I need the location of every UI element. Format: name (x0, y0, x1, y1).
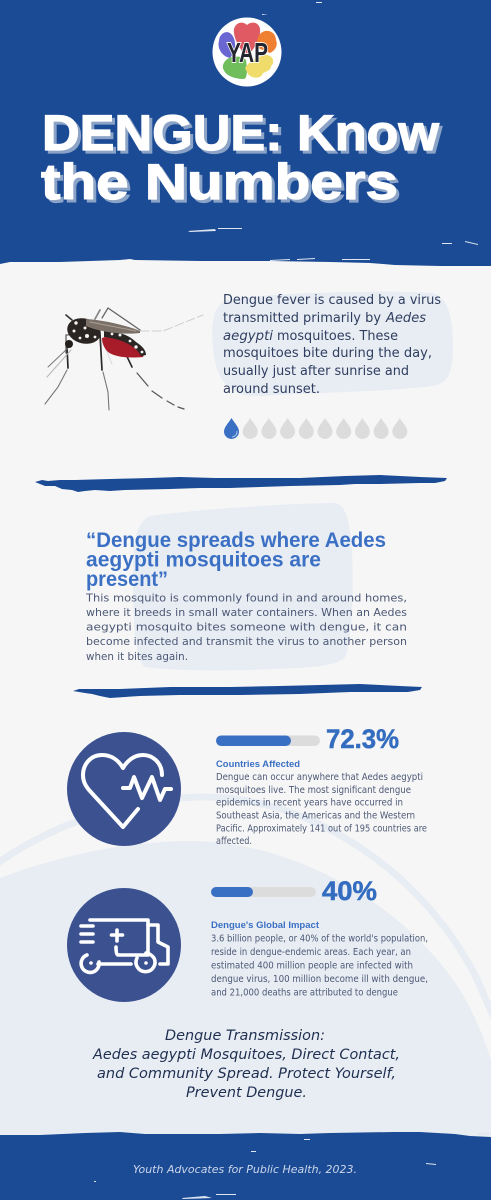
panel: intro text: around sunset. (223, 382, 320, 397)
stat: global impact: 40% (322, 876, 377, 906)
stat: countries affected (216, 724, 427, 847)
icon: ambulance (67, 888, 181, 1002)
quote body text: where it breeds in small water containers. When an Aedes (86, 607, 407, 619)
header banner (0, 0, 491, 266)
quote body text: become infected and transmit the virus to another person (86, 636, 407, 648)
title: DENGUE: Know (42, 105, 439, 161)
panel: quote (85, 503, 407, 670)
text backdrop blob (212, 292, 453, 396)
stat: countries affected: Countries Affected (216, 759, 300, 770)
stat: global impact: reside in dengue-endemic areas. Each year, an (211, 947, 411, 958)
footer banner (0, 1132, 491, 1200)
logo: YAP: YAP (227, 37, 268, 68)
quote body text (85, 592, 407, 663)
closing statement: Aedes aegypti Mosquitoes, Direct Contact, (92, 1047, 400, 1063)
icon: heart with pulse (67, 732, 181, 846)
progress bar 72.3% (216, 736, 320, 746)
closing statement (92, 1028, 400, 1101)
stat: countries affected: affected. (216, 836, 252, 847)
logo: YAP (212, 18, 282, 86)
stat: global impact: dengue virus, 100 million become ill with dengue, (211, 974, 428, 985)
panel: intro text: aegypti (223, 329, 273, 344)
title: the Numbers (41, 154, 398, 210)
quote body text: This mosquito is commonly found in and around homes, (85, 592, 407, 604)
footer banner: Youth Advocates for Public Health, 2023. (133, 1163, 357, 1176)
panel: intro text: mosquitoes bite during the day, (223, 346, 432, 361)
stat: countries affected: Southeast Asia, the Americas and the Western (216, 810, 415, 822)
closing statement: and Community Spread. Protect Yourself, (97, 1066, 396, 1082)
stat: global impact: and 21,000 deaths are attributed to dengue (211, 988, 398, 998)
panel: intro text: Dengue fever is caused by a virus (223, 293, 441, 308)
panel: intro text: Aedes (385, 311, 426, 326)
panel: intro text: transmitted primarily by (223, 311, 381, 326)
title (41, 105, 439, 210)
closing statement: Prevent Dengue. (186, 1085, 307, 1101)
closing statement: Dengue Transmission: (165, 1028, 325, 1044)
quote backdrop blob (133, 503, 353, 670)
stat: countries affected: 72.3% (326, 724, 399, 754)
quote heading (86, 529, 386, 591)
stat: countries affected: mosquitoes live. The most significant dengue (216, 785, 411, 796)
quote body text: when it bites again. (86, 651, 188, 663)
stat: global impact: 3.6 billion people, or 40% of the world's population, (211, 934, 428, 944)
panel: intro text (212, 292, 453, 397)
stat: global impact: estimated 400 million people are infected with (211, 960, 413, 972)
stat: countries affected: epidemics in recent years have occurred in (216, 798, 403, 808)
stat: countries affected: Dengue can occur anywhere that Aedes aegypti (216, 772, 423, 783)
quote heading: “Dengue spreads where Aedes (86, 529, 386, 552)
progress bar 40% (211, 887, 316, 897)
quote body text: aegypti mosquito bites someone with dengue, it can (86, 622, 407, 634)
icon: mosquito (45, 308, 203, 410)
stat: global impact (211, 876, 428, 998)
quote heading: aegypti mosquitoes are (86, 548, 321, 572)
stat: countries affected: Pacific. Approximately 141 out of 195 countries are (216, 824, 427, 834)
pictogram: ten drops, one filled (224, 418, 407, 439)
quote heading: present” (86, 568, 168, 591)
panel: intro text: usually just after sunrise and (223, 364, 409, 379)
stat: global impact: Dengue's Global Impact (211, 920, 320, 931)
panel: intro text: mosquitoes. These (277, 329, 398, 344)
